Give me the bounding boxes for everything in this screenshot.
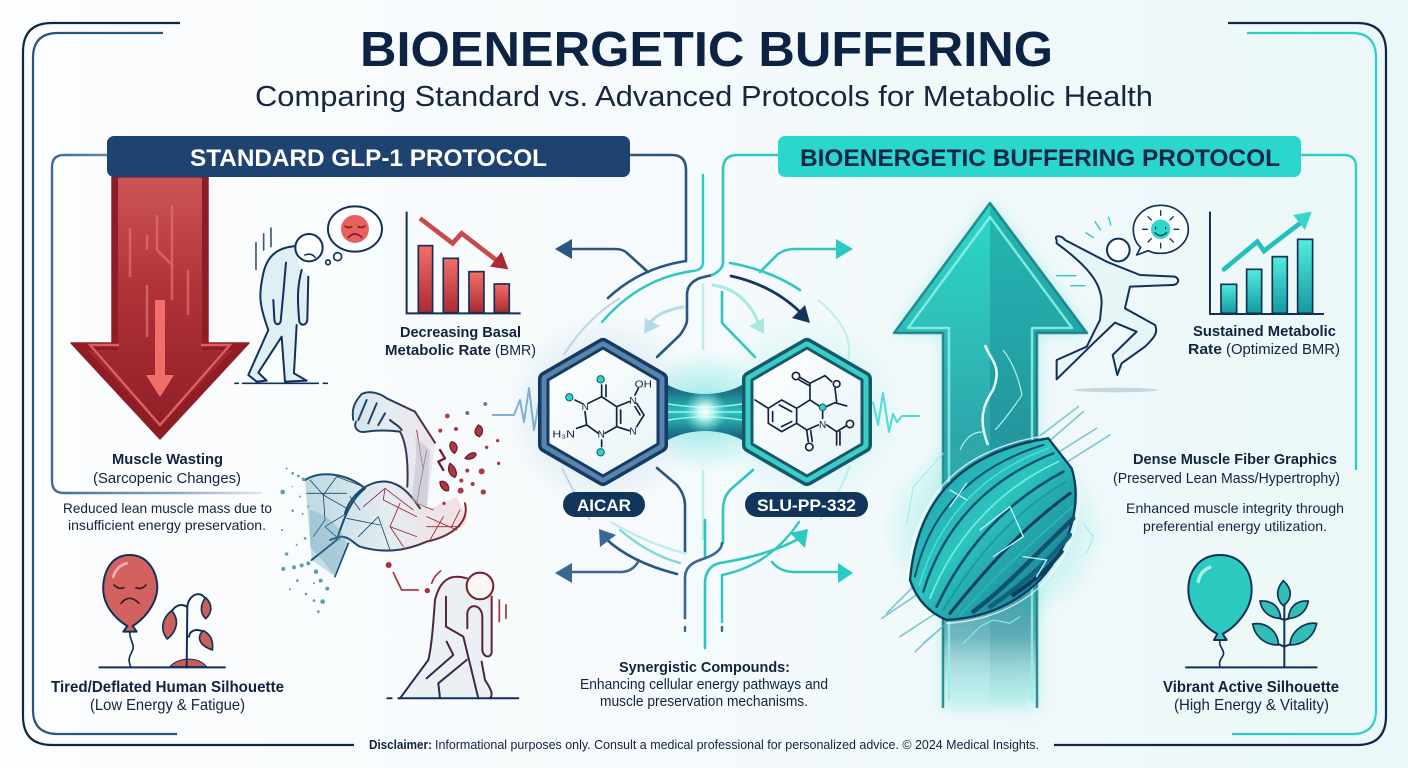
- text: synergistic compounds: Synergistic Compounds:: [619, 659, 790, 676]
- icon: energetic jumping person: [1056, 217, 1178, 392]
- label: sustained metabolic rate: Rate: [1188, 341, 1222, 358]
- panel: standard GLP-1 protocol: [51, 155, 536, 714]
- hexagon: AICAR molecule: H₃N: [552, 429, 575, 440]
- chart: decreasing BMR bars: [407, 212, 521, 313]
- header bar: bioenergetic buffering protocol: BIOENERGETIC BUFFERING PROTOCOL: [800, 145, 1280, 172]
- hexagon: SLU-PP-332 molecule: [750, 346, 864, 478]
- icon: large down arrow: [71, 177, 249, 439]
- label: decreasing BMR: Decreasing Basal: [400, 324, 521, 341]
- label: sustained metabolic rate: [1188, 323, 1340, 358]
- lower arrows: [555, 468, 853, 648]
- text: dense muscle description: preferential energy utilization.: [1143, 518, 1327, 534]
- icon: large glowing up arrow: [894, 203, 1087, 708]
- label: dense muscle fiber graphics: (Preserved Lean Mass/Hypertrophy): [1113, 470, 1340, 487]
- arrows to right panel: [712, 155, 853, 357]
- signal pulses: [492, 388, 920, 432]
- text: muscle wasting description: [63, 500, 272, 533]
- chart: sustained BMR bars: [1210, 212, 1324, 314]
- header bar: standard GLP-1 protocol: [107, 136, 630, 177]
- icon: tired person with sad thought bubble: [235, 206, 382, 383]
- title: BIOENERGETIC BUFFERING: [360, 23, 1053, 77]
- connector between hexagons: [668, 385, 742, 440]
- text: dense muscle description: Enhanced muscle integrity through: [1126, 500, 1344, 516]
- text: synergistic compounds: Enhancing cellular energy pathways and: [580, 676, 828, 693]
- label: muscle wasting: [93, 451, 241, 487]
- panel: centre synergy diagram: [492, 155, 920, 710]
- icon: sad deflated balloon and wilted plant: [99, 555, 225, 667]
- label: muscle wasting: Muscle Wasting: [112, 451, 223, 468]
- arrows from left panel: [555, 155, 712, 357]
- icon: happy sun thought bubble: [1133, 205, 1188, 255]
- hexagon: AICAR molecule: N: [629, 396, 637, 407]
- hexagon: AICAR molecule: N: [629, 426, 637, 437]
- label: dense muscle fiber graphics: Dense Muscle Fiber Graphics: [1133, 451, 1337, 468]
- label: SLU-PP-332: SLU-PP-332: [757, 496, 856, 515]
- hexagon: AICAR molecule: OH: [635, 379, 652, 390]
- hexagon: AICAR molecule: N: [582, 402, 589, 413]
- text: synergistic compounds: muscle preservation mechanisms.: [600, 693, 808, 710]
- hexagon: SLU-PP-332 molecule: N: [819, 420, 826, 431]
- header bar: standard GLP-1 protocol: STANDARD GLP-1 PROTOCOL: [190, 145, 547, 172]
- label: decreasing BMR: Metabolic Rate: [385, 342, 491, 359]
- label: tired silhouette: Tired/Deflated Human Silhouette: [51, 679, 284, 696]
- label: decreasing BMR: [385, 324, 536, 359]
- hexagon: AICAR molecule: N: [598, 429, 605, 440]
- text: dense muscle description: [1126, 500, 1344, 534]
- label: dense muscle fiber graphics: [1113, 451, 1340, 487]
- glow behind hexagons: [505, 314, 905, 510]
- label: sustained metabolic rate: Sustained Metabolic: [1193, 323, 1336, 340]
- panel: bioenergetic buffering protocol: [880, 155, 1356, 714]
- text: muscle wasting description: insufficient energy preservation.: [68, 517, 266, 533]
- label: vibrant active silhouette: [1163, 679, 1339, 714]
- label: AICAR: [563, 492, 645, 517]
- disclaimer: Disclaimer:: [369, 737, 432, 752]
- panel outline left: [52, 155, 262, 493]
- label: decreasing BMR: (BMR): [495, 342, 536, 359]
- label: sustained metabolic rate: (Optimized BMR): [1226, 341, 1340, 358]
- faint circular arcs: [562, 283, 850, 540]
- panel outline right: [1301, 155, 1356, 470]
- disclaimer: Informational purposes only. Consult a medical professional for personalized advice. © 2024 Medical Insights.: [435, 737, 1039, 752]
- icon: hunched person with back pain: [386, 562, 518, 698]
- subtitle: Comparing Standard vs. Advanced Protocols for Metabolic Health: [255, 81, 1153, 113]
- icon: vibrant balloon and healthy plant: [1186, 555, 1317, 667]
- icon: disintegrating muscular arm: [280, 392, 500, 613]
- hexagon: AICAR molecule: [546, 346, 660, 478]
- label: SLU-PP-332: [745, 492, 868, 517]
- label: tired silhouette: [51, 679, 284, 714]
- label: muscle wasting: (Sarcopenic Changes): [93, 470, 241, 487]
- text: muscle wasting description: Reduced lean muscle mass due to: [63, 500, 272, 516]
- icon: dense muscle fibre bundle: [880, 407, 1110, 652]
- label: tired silhouette: (Low Energy & Fatigue): [90, 697, 245, 714]
- label: vibrant active silhouette: (High Energy & Vitality): [1174, 697, 1329, 714]
- text: synergistic compounds: [580, 659, 828, 710]
- label: AICAR: AICAR: [577, 496, 631, 515]
- label: vibrant active silhouette: Vibrant Active Silhouette: [1163, 679, 1339, 696]
- header bar: bioenergetic buffering protocol: [778, 136, 1301, 177]
